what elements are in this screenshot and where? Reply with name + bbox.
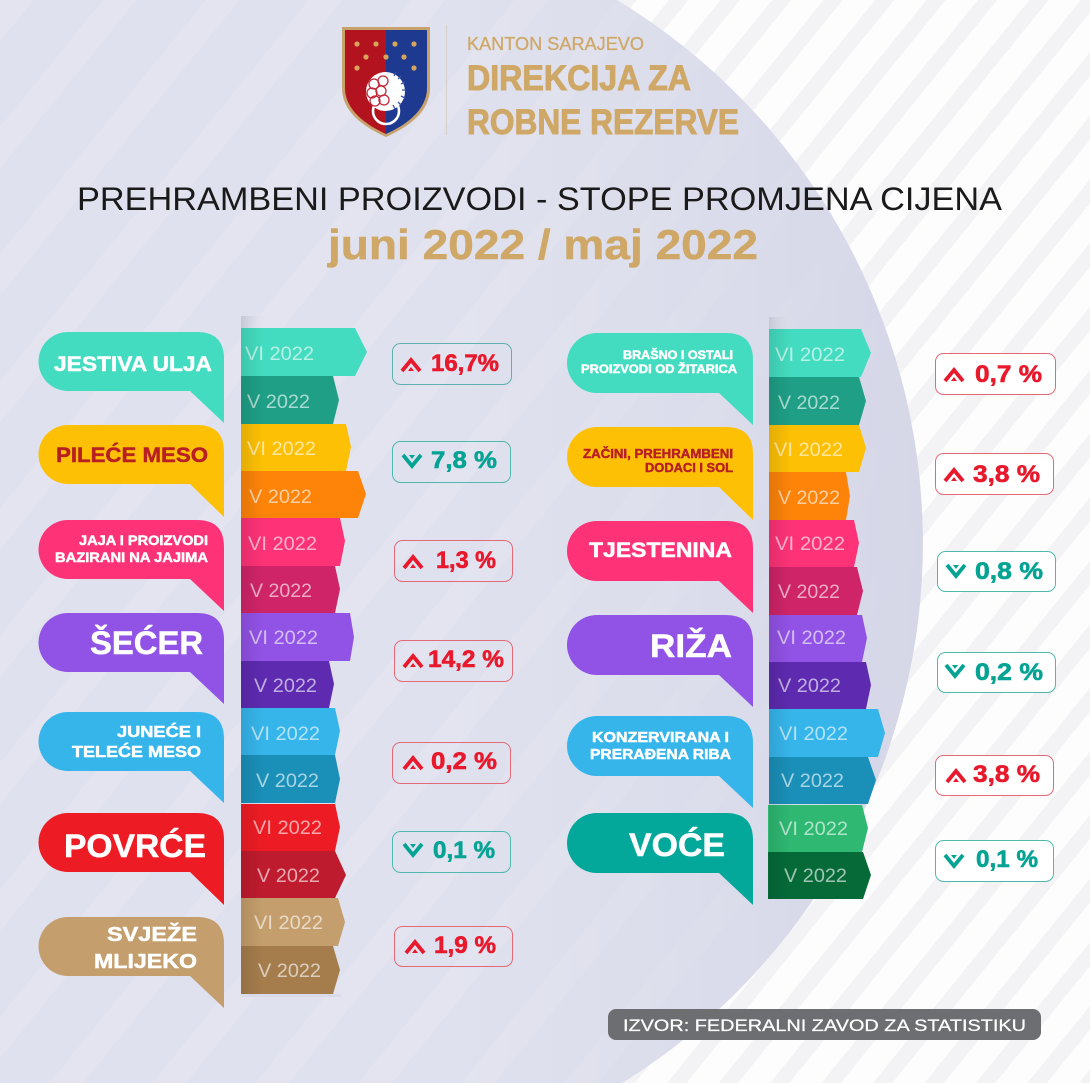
- item: Juneće i teleće meso: V 2022: [256, 771, 319, 792]
- item: Pileće meso: PILEĆE MESO: [56, 443, 208, 467]
- item: Brašno i ostali proizvodi: PROIZVODI OD ŽITARICA: [581, 361, 737, 376]
- item: Povrće: VI 2022: [253, 818, 322, 839]
- item: Voće: VOĆE: [629, 827, 725, 863]
- ribbon shadows: [241, 316, 793, 997]
- item: Jestiva ulja: [38, 328, 512, 424]
- item: Voće: 0,1 %: [976, 846, 1038, 873]
- item: Povrće: [38, 804, 510, 905]
- item: Povrće: 0,1 %: [433, 837, 495, 864]
- icon: coat of arms shield: [342, 27, 430, 137]
- item: Voće: V 2022: [784, 866, 847, 887]
- item: Tjestenina: 0,8 %: [975, 558, 1043, 585]
- item: Jaja i proizvodi: [38, 518, 512, 613]
- item: Riža: RIŽA: [650, 628, 732, 664]
- subtitle: period: juni 2022 / maj 2022: [327, 221, 758, 268]
- item: Jaja i proizvodi: BAZIRANI NA JAJIMA: [55, 549, 208, 565]
- item: Šećer: V 2022: [254, 676, 317, 697]
- item: Brašno i ostali proizvodi: [567, 329, 1056, 425]
- item: Jestiva ulja: JESTIVA ULJA: [54, 353, 212, 376]
- item: Juneće i teleće meso: 0,2 %: [431, 748, 497, 775]
- item: Začini, prehrambeni dodaci i sol: ZAČINI, PREHRAMBENI: [583, 446, 733, 461]
- item: Šećer: 14,2 %: [428, 646, 504, 673]
- item: Povrće: V 2022: [257, 866, 320, 887]
- item: Začini, prehrambeni dodaci i sol: V 2022: [778, 488, 840, 509]
- item: Svježe mlijeko: 1,9 %: [434, 932, 496, 959]
- source note: IZVOR: FEDERALNI ZAVOD ZA STATISTIKU: [623, 1016, 1026, 1035]
- item: Konzervirana i prerađena riba: V 2022: [781, 771, 844, 792]
- item: Začini, prehrambeni dodaci i sol: DODACI I SOL: [645, 461, 733, 475]
- item: Začini, prehrambeni dodaci i sol: VI 2022: [774, 440, 843, 461]
- item: Povrće: POVRĆE: [64, 828, 206, 864]
- item: Konzervirana i prerađena riba: PRERAĐENA RIBA: [590, 746, 731, 763]
- source note: [608, 1009, 1041, 1040]
- item: Tjestenina: TJESTENINA: [589, 539, 732, 562]
- item: Riža: 0,2 %: [975, 659, 1043, 686]
- item: Juneće i teleće meso: VI 2022: [251, 724, 320, 745]
- item: Pileće meso: [38, 424, 510, 518]
- item: Tjestenina: [567, 520, 1056, 615]
- item: Svježe mlijeko: V 2022: [258, 961, 321, 982]
- item: Jestiva ulja: 16,7%: [431, 350, 499, 377]
- item: Konzervirana i prerađena riba: KONZERVIRANA I: [592, 729, 729, 746]
- item: Tjestenina: V 2022: [778, 582, 840, 603]
- item: Svježe mlijeko: SVJEŽE: [107, 922, 197, 946]
- item: Jestiva ulja: VI 2022: [245, 344, 314, 365]
- item: Začini, prehrambeni dodaci i sol: [567, 425, 1054, 520]
- item: Brašno i ostali proizvodi: V 2022: [778, 393, 840, 414]
- ribbon left-edge shading: [241, 328, 791, 994]
- item: Brašno i ostali proizvodi: BRAŠNO I OSTALI: [623, 347, 733, 362]
- item: Jestiva ulja: V 2022: [247, 392, 310, 413]
- item: Konzervirana i prerađena riba: VI 2022: [779, 724, 848, 745]
- item: Pileće meso: V 2022: [249, 487, 312, 508]
- logo: Direkcija za robne rezerve: [342, 25, 739, 142]
- item: Tjestenina: VI 2022: [775, 534, 845, 555]
- item: Juneće i teleće meso: [38, 708, 510, 803]
- item: Svježe mlijeko: MLIJEKO: [94, 951, 197, 973]
- item: Šećer: VI 2022: [249, 628, 318, 649]
- item: Brašno i ostali proizvodi: VI 2022: [775, 345, 845, 366]
- item: Šećer: ŠEĆER: [90, 625, 203, 661]
- item: Jaja i proizvodi: V 2022: [250, 581, 312, 602]
- item: Jaja i proizvodi: 1,3 %: [436, 547, 496, 574]
- logo: Direkcija za robne rezerve: DIREKCIJA ZA: [467, 59, 691, 98]
- item: Voće: [567, 805, 1054, 905]
- item: Pileće meso: VI 2022: [247, 439, 316, 460]
- item: Konzervirana i prerađena riba: [567, 709, 1054, 808]
- item: Jaja i proizvodi: VI 2022: [248, 534, 317, 555]
- logo: Direkcija za robne rezerve: KANTON SARAJEVO: [467, 34, 644, 54]
- item: Jaja i proizvodi: JAJA I PROIZVODI: [79, 532, 208, 548]
- logo: Direkcija za robne rezerve: ROBNE REZERVE: [467, 103, 739, 142]
- item: Konzervirana i prerađena riba: 3,8 %: [973, 761, 1040, 788]
- item: Brašno i ostali proizvodi: 0,7 %: [975, 361, 1042, 388]
- item: Svježe mlijeko: [38, 898, 512, 1008]
- item: Pileće meso: 7,8 %: [431, 447, 497, 474]
- item: Svježe mlijeko: VI 2022: [254, 913, 323, 934]
- item: Riža: VI 2022: [777, 628, 846, 649]
- item: Šećer: [38, 613, 512, 708]
- title: PREHRAMBENI PROIZVODI - STOPE PROMJENA CIJENA: [77, 181, 1003, 217]
- item: Juneće i teleće meso: JUNEĆE I: [117, 722, 201, 741]
- item: Voće: VI 2022: [779, 819, 848, 840]
- item: Začini, prehrambeni dodaci i sol: 3,8 %: [973, 461, 1040, 488]
- item: Juneće i teleće meso: TELEĆE MESO: [72, 742, 201, 761]
- item: Riža: [567, 615, 1056, 709]
- item: Riža: V 2022: [778, 676, 841, 697]
